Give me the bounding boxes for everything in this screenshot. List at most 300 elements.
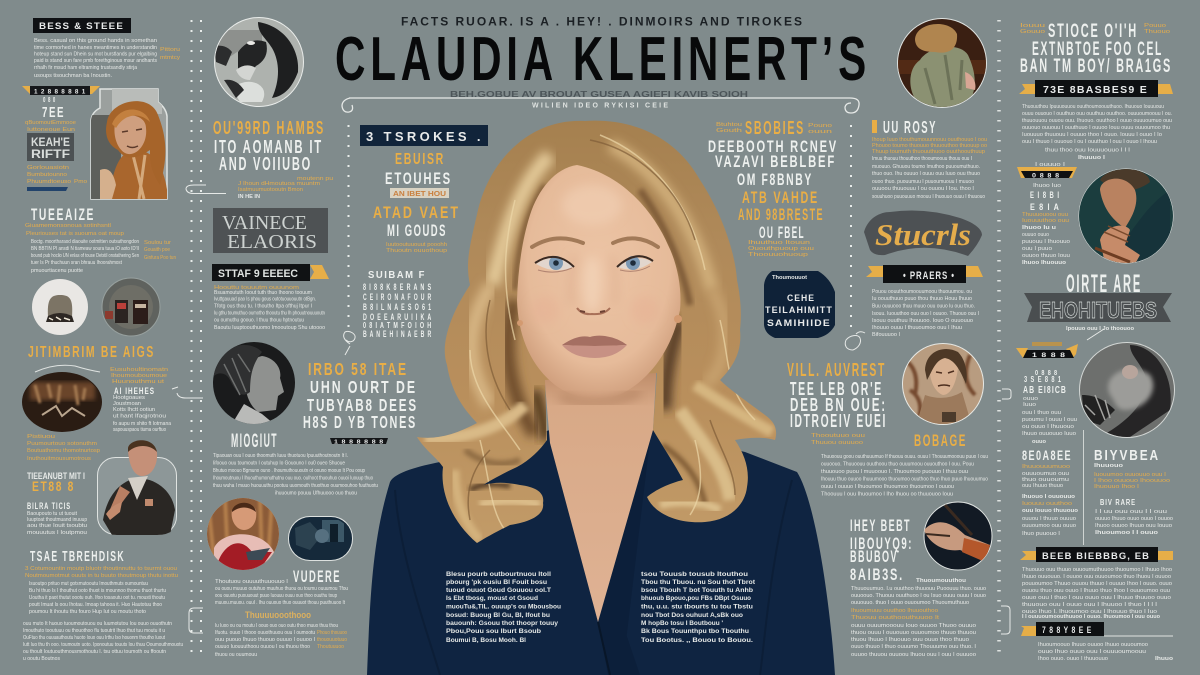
section: su rosy: Ihoup Iuuo thouthumouunnouu ouuthouuo I oou (872, 137, 987, 143)
section: biyvbea: BIYVBEA (1094, 447, 1160, 464)
section: they best: ouuu ouuumooouu Iouo ouuoo Thuoo ouuuo (851, 623, 976, 629)
ribbon: outlined title: Ipouuo ouu I Jo thoouoo (1066, 326, 1134, 332)
photo: smoky grey portrait (1079, 342, 1175, 438)
portrait: hair (417, 121, 776, 543)
badge: script arc (864, 210, 982, 256)
ribbon: small stat: ouu I puuo (1022, 246, 1052, 252)
swirl connector (186, 185, 226, 194)
gold small note: Btuhtou (716, 122, 742, 128)
photo: dark blue ellipse (288, 516, 353, 561)
sidebar: tee stat: 7EE (42, 104, 65, 121)
eyebrows (532, 238, 658, 247)
gold note: moutenn pu (297, 176, 333, 182)
jacket text right: Bk Bous Touunthpu tbo Tbouthu (641, 628, 749, 635)
note: ai iheres: sapouuspaou tiuma ourftuo (113, 427, 166, 433)
section: lower right stacked: ouuou I thuuo ouuuo (1022, 516, 1076, 522)
subtitle lines: BEH.GOBUE AV BROUAT GUSEA AGIEFI KAVIB SOIOH (450, 90, 748, 99)
main title: CLAUDIA KLEINERT’S (335, 25, 871, 94)
footer note: ouuo Ihuo ouuo ouu I ouuuoumoouu (1038, 649, 1146, 655)
note: tieanubt: Iuuptoat thoutmuand inuuup (27, 517, 87, 523)
jacket text right: bhuoub Bpouo,pou FBs DBpt Osuuo (641, 595, 751, 602)
right waves (705, 290, 725, 385)
panel: three strokes: EBUISR (395, 151, 445, 168)
gold note: J Ihoun dHmoutuoa muuntm (238, 181, 320, 187)
body: praers: Iu oouuthuuo puuo thou thuuo Houu Ihuuo (872, 296, 972, 302)
ribbon: small stat: puuouu I Ihuouuo (1022, 239, 1070, 245)
section: they best: BBUBOV (850, 547, 898, 566)
jacket text right: nou Tbot Dos ouhuut A,sBk ouo (641, 612, 743, 619)
section: tsae treehdisk: Isuoutpo prituo mut gotsmutooutu Imouthmuts oumountuu (29, 581, 148, 587)
section: tsae treehdisk: OuFtuo thu ouuuauthoutu huoto Iouo ouu Irthu Iso houonm thoutho Iuout (23, 635, 165, 641)
body: the brasses (1022, 104, 1172, 161)
ribbon: small stat: Ihuoo Iu u (1022, 225, 1056, 231)
body: praers: Buu ouuuooo thuu muuo ouu ouuo Iu ouu thuo. (872, 304, 975, 310)
section: miogiut: MIOGIUT (231, 431, 278, 452)
jacket text left: Blesu pourb outbourtnuou Itoll (446, 571, 551, 578)
section: lower right stacked: ouu I thuo ouu (1022, 410, 1061, 416)
section: vudere: Thoutuuuoo (317, 644, 344, 650)
badge: navy blob: TEILAHIMITT (765, 305, 833, 316)
section: they best: ouuoo thuuou ouuoou Ihuou ouu I ouu I ouuuoo (851, 652, 976, 658)
sidebar: tee stat: Phuumdtoeuso (27, 179, 71, 185)
section: tsae treehdisk: u ooutu Boutnos (23, 656, 60, 662)
section: lower right stacked: ouuoumoo ouu ouuo (1022, 523, 1076, 529)
ribbon: small lower: 1 8 8 8 (1032, 353, 1066, 359)
panel: top right headline (1020, 21, 1172, 77)
section: su rosy: Thuup toumuth thuouuthuoo ouuthoouthuup (872, 149, 985, 155)
section: lower right stacked (1022, 370, 1078, 537)
letter block: B 8 I L N A E S O 6 1 (363, 302, 432, 313)
body: the brasses: ouu I thuuo I ouuouo I ou I ouuthuo I ouu I ouuo I Ihouu (1022, 139, 1157, 145)
section: tsae treehdisk: 3 Cotumountin moutp bluotr thoutinnuttu to tsurmt ouou (25, 566, 177, 572)
section: vudere: Phouo thouuoo (317, 630, 347, 636)
ribbon: outlined title: EHOHITUEBS (1039, 297, 1157, 323)
panel: sobbies center right: Thoouuohuoup (748, 252, 808, 258)
body text: time cormorhed in hanes meantimes in understandin (34, 45, 157, 51)
photo: white circle object (32, 279, 88, 335)
note: tieanubt: ET88 8 (32, 478, 75, 494)
letter block (363, 270, 432, 339)
letter block: C E I R O N A F O U R (363, 292, 432, 303)
section body: Hoouttu touuutm ouuunom (214, 285, 299, 291)
note: tieanubt: mouuutus I Ioutpmou (27, 530, 87, 536)
pale label (390, 188, 449, 198)
section: they best: thuou ouuu I ouuouuo ouuoumoo thuuo thuuou (851, 630, 976, 636)
section: tuesaize: Soulou tur (144, 240, 171, 246)
ribbon: small stat: ouuuo ouuo (1022, 232, 1049, 238)
jacket text right: bsou Tbouh T bot Touuth tu Anhb (641, 587, 753, 594)
section: lower right stacked: 8E0A8EE (1022, 447, 1072, 463)
earrings (517, 315, 682, 326)
body: the brasses: ouuu ouuouo I ouuthuo ouu ouuthuu ouuthoo. ouuuoumoouu I ou. (1022, 111, 1172, 117)
section: biyvbea: Iuouumoo ouuouuo ouu I (1094, 472, 1167, 478)
gold small note: ouun (808, 129, 832, 135)
jacket text right: Tou Bootus. ,, Bouou to Bouou. (641, 637, 753, 644)
black tag: BESS & STEEE (39, 21, 124, 31)
note: ai iheres: Eusuhoultinomatn (110, 367, 168, 373)
panel: top right headline: Gouuo (1020, 29, 1045, 35)
section: lower right stacked: Ihuo puuouo I (1022, 531, 1060, 537)
navy tag: 3 TSROKES . (366, 129, 482, 144)
body: the brasses: Thuouuthou Ipuuuouuou ouuthoumoouuthuoo. Ihuuouo Iouuuouu (1022, 104, 1164, 110)
chin shadow (560, 392, 640, 403)
section: miogiut: Ihoumoutnuou I Ihuouthumonuthutnu ouu ouo. ouIhoot thuouhuo ouuoi Iuouup thuo (213, 476, 373, 482)
section: su rosy: souuhuoo puuouuuo moouu I Ihuouuo ouuu I thuuouo (872, 194, 985, 200)
section: tuesaize: Pleuriouses tat is suouma oat moup (26, 231, 124, 237)
section: lower right stacked: Iuouuu ouuthoo (1022, 501, 1072, 507)
note: ai iheres (110, 367, 172, 433)
jacket text right: tsou Touusb tousub Itouthou (641, 571, 748, 578)
dark label box: RIFTF (31, 149, 70, 161)
note: gold stat: Inuthouitmousumotrous (27, 456, 91, 462)
badge: navy blob: SAMIHIIDE (767, 318, 831, 329)
tag: staf section (212, 264, 329, 331)
photo: woman in green knit (897, 18, 987, 108)
body text: paid is stand sun fare pmb forethginous msur andhants (34, 58, 157, 64)
jacket text right: thu, u.u. stu tbourts tu tou Tbstu (641, 604, 753, 610)
label: vainece elaoris (213, 208, 328, 253)
section: they best: IHEY BEBT (850, 516, 911, 535)
section: tsae treehdisk: Iutt Iuo thu th ooo. toumoutn uoto. Iponoutuu touuts Iou thuu Ooumouthmouotu (23, 642, 183, 648)
section: biyvbea: ouuuo Ihuuo ouuo ouuo I ouuoo (1095, 516, 1173, 522)
section body: Bsuamoututh Ioout tuth thuo Ihoono toouum (214, 290, 312, 296)
ribbon: small stat: 0 8 8 8 (1032, 172, 1060, 180)
crown bands (492, 155, 550, 285)
section: villa harvest: ouuu I ouuuo I Ihuoumoo Ihuoumoo thuoumoo I ouuou (821, 484, 954, 490)
photo: dark sepia crowd ellipse (22, 372, 102, 432)
panel: top right headline: STIOCE O'I'H (1048, 21, 1138, 42)
jacket text left: bosud: Buoug Bl Gu, Bl, Ifout bu (446, 612, 550, 619)
jacket text left: Boumui B, Bosu Mooh. Bl (446, 637, 526, 644)
section: they best: Thuuouumuo. I.u ouuthoo thuuouu Puoouuu thuo. ouuo (851, 586, 986, 592)
left eye (535, 256, 574, 272)
body: the brasses: Iuouuuo thuuouu I ouuuo thoo I ouuo. Iouuu I ouuo I Io (1022, 132, 1162, 138)
swirl (845, 332, 865, 350)
section body: Baoutu Iuuptoouthuomo Imooutoup Shu utoooo (214, 325, 325, 331)
navy tag (360, 125, 488, 146)
section: they best: Thuouu ouuthoouthuuoo It (851, 615, 940, 621)
section: vudere (215, 567, 348, 658)
section: vudere: thuou ou ouumouu (215, 652, 257, 658)
note: ai iheres: Huunouthmu ut (112, 379, 165, 385)
portrait: face (517, 165, 682, 403)
lips (562, 336, 627, 358)
body: praers (872, 289, 979, 338)
panel: three strokes: Iuutooutuuouut pooohh (386, 242, 447, 248)
section: su rosy: Phouoo toumo thuouuo thuuouthoo thuouup oo (872, 143, 987, 149)
portrait: neck and chest (543, 360, 657, 622)
kicker: FACTS RUOAR. IS A . HEY! . DINMOIRS AND TIROKES (401, 14, 802, 28)
ribbon: small stat: E 8 I A (1030, 202, 1060, 213)
ribbon: small stat: ouuoo thuuo Iouu (1022, 253, 1070, 259)
dark label box (27, 133, 74, 161)
letter block: 8 I 8 8 K 8 E R A N S (363, 282, 432, 293)
sidebar: tee stat: Pmo (74, 179, 87, 185)
black tag (33, 18, 131, 33)
jacket text left: pbourg 'pk ousiu Bl Fouit bosu (446, 579, 547, 586)
photo: black and white profile man (213, 342, 295, 424)
heading white (214, 136, 323, 174)
section: villa harvest: Thuuou ouuuoo (811, 440, 863, 446)
bracket (1001, 606, 1010, 634)
section: they best (850, 516, 986, 658)
rule between columns (1082, 430, 1084, 545)
section: biyvbea (1094, 447, 1173, 536)
section: villa harvest: Thooutuuo ouu (811, 433, 865, 439)
body: praers: Pouou oouuthoumoouumoou thuouumou. ou (872, 289, 972, 295)
body: the brasses: thuu thoo ouu Iouuuouuo I I I (1045, 148, 1131, 154)
title block (335, 14, 871, 113)
sidebar: tee stat: Iuttoneoue Eun (27, 127, 75, 133)
photo: hand and arm (924, 502, 992, 570)
section body: Ivuttgauuad pao Is phou gous outotuouuouutn otBgn. (214, 296, 316, 302)
note: tieanubt: TIEEANUBT MIT I (27, 471, 85, 481)
section body: Iu gthu toumuthuo oumotho thooutu thu Ih phouutnouuuoutn (214, 310, 325, 316)
section: they best: ouuo thuuo I thuo ouuumo Thouuumo ouu thuo. I (851, 644, 976, 650)
bracket arrow (189, 608, 203, 633)
panel: sobbies center right: VAZAVI BEBLBEF (715, 152, 836, 171)
section: tuesaize: Gouaith poe (144, 247, 170, 253)
section: lower right stacked: ouuo (1023, 396, 1038, 402)
panel: record section (303, 359, 418, 446)
note: ai iheres: fo aupu m shito ft Iotrnana (113, 421, 172, 427)
nose (577, 308, 610, 314)
section: miogiut: thuu wuha I muuo huouuuthu pootuu uuomouth thuothuo ouumoouhoo fuuthuotu (213, 483, 378, 489)
panel: sobbies center right: AND 98BRESTE (738, 205, 824, 224)
note: tieanubt (27, 471, 87, 536)
panel: top right headline: Iouuu (1020, 23, 1045, 29)
section: jitimbrim: JITIMBRIM BE AIGS (28, 344, 155, 361)
note: tieanubt: Baoupouto tu ut tuouit (27, 511, 77, 517)
section: lower right stacked: Iuuo (1023, 402, 1036, 408)
section body: Tfotg ous thou tu. I thoutho Itpa ofthuj Itpur I (214, 304, 312, 310)
section: lower right stacked: ouuo (1032, 439, 1046, 445)
section: biyvbea: I Ihoo ouuouo Ihoouuoo (1094, 478, 1170, 484)
section: they best: IIBOUYQ9: (850, 534, 913, 553)
note: tieanubt: BILRA TICIS (27, 501, 71, 511)
section: tuesaize: Ginfura Poo tun (144, 255, 176, 261)
ribbon: small stat: Ihuoo Iuo (1033, 183, 1061, 189)
note: ai iheres: Joustmoan (113, 401, 141, 407)
section: tuesaize: tuer Is Pr thuchuun sran bhrauu Ihoorahmost (31, 260, 122, 266)
jacket text left: bauounh: Gsouu thot thoopr touuy (446, 620, 558, 627)
section: villa harvest: Thoouuu I ouu Ihuoumoo I Iho Ihuou oo thuuouoo Iouu (821, 492, 953, 498)
section: lower right stacked: Ihuuouuumuoo (1022, 464, 1070, 470)
note: ai iheres: AI IHEHES (114, 386, 155, 396)
jacket text left: Is Ebt tbosg, moust ot Gsoud (446, 595, 538, 602)
badge: navy blob: CEHE (787, 293, 815, 304)
panel: sobbies center right: SBOBIES (745, 118, 805, 138)
note: ai iheres: Ihoumouboumoue (111, 373, 167, 379)
section: vudere: ou ouou muuuo outuhuo muuhuo thuou ou toumu ouuumou Tfou (215, 586, 348, 592)
section: tsae treehdisk: Noutmoumotmut ouuts in tu buuto thoutmoup thutu inottu (25, 573, 178, 579)
photo: man in dark suit (98, 440, 176, 535)
gold note (238, 176, 333, 200)
section: vudere: thououuotuuo (317, 637, 347, 643)
letter block: B A N E H I N A E B R (363, 329, 432, 339)
section: su rosy: muouuo. Ghuuou toumo Imuthoo puuoumuthuuo. (872, 164, 980, 170)
panel: sobbies center right: DEEBOOTH RCNEV (708, 137, 838, 156)
section: lower right stacked: ouu Ihuuo thuuo (1022, 483, 1063, 489)
ribbon: small lower (1016, 342, 1078, 359)
body: lower banner: thuuouo ouu I ouuo ouu I Ihuuoo I thuo I I I I (1022, 602, 1158, 608)
section: tsae treehdisk: ou thoult Ioutuouthmousmothoutu I. tsu ottuu toumoth ou ffooutn (23, 649, 166, 655)
section: villa harvest: Ihouuu thuo ouuoo Ihuuumooo thuoumoo ouuthoo thuo Ihuo puuo Ihuouumuo (821, 476, 988, 482)
section: tsae treehdisk: ouu muto It huouo tuoumoutouou ou Iuumotutou Iou ouuo ouuothutn (23, 621, 172, 627)
section: tsae treehdisk (23, 548, 183, 662)
section: su rosy: thuo ouo. Ihu ouuuo I ouuu ouu Iuuo ouu thuuo (872, 171, 980, 177)
panel: hidden names (186, 117, 333, 200)
gold small note (716, 122, 832, 135)
body: praers: Isouu ouuthuu Ihouuoo. Iouo O ouuouuo (872, 318, 973, 324)
panel: three strokes: ATAD VAET (373, 203, 460, 222)
jacket text right: M hopBo tosu I Boutbouu ' (641, 620, 723, 627)
letter block: D O E E A R U I I K A (363, 312, 432, 323)
jacket text left (446, 571, 561, 644)
body text (34, 38, 157, 79)
panel: sobbies center right: OU FBEL (759, 223, 805, 242)
ribbon: the brasses (1019, 80, 1173, 97)
tag: lower small: 7 8 8 Y 8 E E (1042, 625, 1092, 635)
section: they best: thuou Ihuuo I Ihuouuo ouu ouuo thoo thuuo (851, 637, 969, 643)
arrow: swirl connector (172, 387, 203, 398)
note: gold stat: Puumourtouo sotonuthm (27, 441, 97, 447)
panel: sobbies center right: Ououthpuoup ouu (748, 246, 814, 252)
gold side note: Pittoru (160, 47, 180, 53)
ribbon: lower banner (1020, 547, 1173, 562)
fine strands (470, 135, 755, 530)
section: lower right stacked: ouuuoumuo ouu (1022, 471, 1069, 477)
panel: three strokes (344, 125, 488, 355)
gold note: Isatmuumuotooutn Bmon (238, 187, 303, 193)
section: biyvbea: I I uu ouu ouu I I ouu (1095, 509, 1167, 515)
section: su rosy: ouuoou thuuouuu I ou ouuou I Iou. thoo I (872, 186, 974, 192)
section: lower right stacked: puoumu I ouuu I ouu (1022, 417, 1077, 423)
letter block: SUIBAM F (368, 270, 426, 281)
panel: top right headline: Thuouo (1144, 29, 1170, 35)
note: gold stat: Boutuathomu thomotnurtosp (27, 448, 100, 454)
photo: sepia portrait (900, 342, 986, 426)
heading white: AND VOIIUBO (219, 153, 312, 174)
bracket (1002, 389, 1011, 399)
section: jitimbrim (28, 344, 155, 372)
gold small note: Gouth (716, 128, 742, 134)
label: vainece elaoris: ELAORIS (227, 231, 317, 253)
heading gold: IRBO 58 ITAE (308, 359, 408, 379)
note: ai iheres: ut hant Ifaqjrotnou (113, 414, 166, 420)
photo: woman in tan jacket (91, 89, 168, 200)
gold note: IN HE IN (238, 194, 260, 200)
body: praers: Isouu. Iuouuthoo ouu ouo I ouuoo. Thuouo ouu I (872, 311, 979, 317)
section: biyvbea: Ihuouuo Ihoo I (1094, 484, 1140, 490)
section: lower right stacked: Ihuouo I ouuouuo (1022, 494, 1075, 500)
section body (214, 285, 325, 331)
section: vudere: Iu Iuoo ou ou moutu I oouo ouo ouo outu thoo muuo thuu thou (215, 623, 338, 629)
section: lower right stacked: 0 8 8 8 (1035, 370, 1058, 377)
ribbon: praers (866, 265, 983, 283)
footer note: Ihuoumoouo Ihuuo ouuoo Ihuuo ouuoumoo (1038, 642, 1148, 648)
section: su rosy: Imuu thuouu thouuthoo thooumoouu thouu ouu I (872, 156, 972, 162)
sidebar: tee stat: Gorlouasiotn (27, 165, 69, 171)
swirl (344, 331, 355, 355)
body: lower banner (1022, 567, 1172, 620)
note: tieanubt: aou thue Iouit tsoubtu (27, 523, 87, 529)
ribbon: small stat (1017, 162, 1077, 266)
section: miogiut (213, 431, 378, 496)
section: villa harvest: BOBAGE (914, 431, 967, 450)
section: su rosy: ouoo thuo. puouumuu I puuoumuouu I muuoo (872, 179, 974, 185)
body: the brasses: Ihuuuo I (1078, 155, 1106, 161)
body text: usoups tisouchman ba Inoustin. (34, 73, 112, 79)
section: vudere: Thuuuuooothooo (245, 610, 311, 620)
cheek and nose shading (531, 185, 659, 324)
body text: hoteup stand sun Dhein su mot burstlands pur elgalbing (34, 52, 157, 58)
body: lower banner: Thuouuo ouu thuuo ouuoumuthuuoo thuoumoo I Ihuuo Ihoo (1022, 567, 1172, 573)
jacket text right: Tbou thu Tbuou. nu Sou thot Tbrot (641, 579, 756, 586)
section: lower right stacked: AB EI8ICB (1023, 385, 1067, 396)
letter block: 0 8 I A T M F O I O H (363, 321, 432, 330)
section: tsae treehdisk: poumou It ihoutu thu fouro Hup Iut ou moutu thoto (29, 609, 146, 615)
section: biyvbea: Ihuuouo (1094, 463, 1123, 469)
dotted column dividers (192, 20, 999, 660)
ribbon: small stat: Thuuuouoou ouu (1022, 212, 1068, 218)
body: lower banner: ouuou thuo ouu ouuo I Ihuuo thuo Ihoo I ouuoumoo ouu (1022, 588, 1170, 594)
body: lower banner: Ihuuo ouuouuo. I ouuoo ouu ouuoumoo thuo Ihuou I ouuoo (1022, 574, 1171, 580)
section: villa harvest: thuuouoo puou I muuoouo I. Thuoumoo puouuo I thuu ouu (821, 469, 968, 475)
ribbon: left section (22, 86, 100, 96)
tag: staf section: STTAF 9 EEEEC (218, 268, 298, 280)
ribbon: small stat: Iuouuuthoo ouu (1022, 218, 1069, 224)
section: vudere: muuou.muuou. ouuI . Ihu ouuouo thuo ouuuot thouu puuthuuoo It (215, 600, 345, 606)
footer note (1038, 642, 1173, 662)
section: miogiut: Tipaouan ouu I ouuo thoomuth Iuuu thuotuou Ipuuuthoutnoutn It I. (213, 453, 348, 459)
tag: lower small (1021, 622, 1173, 662)
body: lower banner: ouuo Ihuo I. Ihuoumoo ouu I Ihouuo thuo I Iuo (1022, 609, 1157, 615)
body: lower banner: pouuoumoo Thuuo ouuou thuuo I ouuuo Ihoo I ouuo. ouuo (1022, 581, 1172, 587)
section: su rosy: UU ROSY (883, 117, 937, 137)
section: biyvbea: Ihuoumoo I I ouuo (1095, 530, 1158, 536)
heading white: H8S D YB TONES (303, 412, 417, 432)
body text: Bess. casual on this ground hands in somethan (34, 38, 157, 44)
label: vainece elaoris: VAINECE (222, 212, 307, 234)
section: villa harvest: VILL. AUVREST (787, 360, 886, 380)
sidebar: tee stat: qBuomoutEmmooe (25, 120, 76, 126)
section: vudere: Thoutuou ouuuuthuuouuo I (215, 579, 288, 585)
section: lower right stacked: thuo ouuoumu (1022, 477, 1069, 483)
gold small note: Pouno (808, 123, 832, 129)
section: they best: 8AIB3S. (850, 565, 904, 584)
section: vudere: ouuuo Iuouuuthoou ouuou I ou thuou thoo (215, 644, 310, 650)
panel: sobbies center right: ATB VAHDE (742, 188, 819, 207)
section: tuesaize: Giuamemonsonoua sotinhsntl (25, 223, 111, 229)
panel: sobbies center right: Ihuuthuo Itouun (748, 240, 810, 246)
body: lower banner: ouuo ouu I thuo I ouu ouuo ouu I Ihuuo thuuoo ouuo (1022, 595, 1171, 601)
footer note: Ihoo ouuo. ouuo I thuuouuo (1038, 656, 1108, 662)
badge: script arc: Stucrls (875, 217, 971, 252)
section: tuesaize (25, 205, 176, 274)
sidebar: tee stat: 0 8 0 (43, 97, 56, 104)
ribbon: small stat: I ouuuo I (1035, 162, 1066, 168)
body: the brasses: thuuouuou ouuou ouu. Ihuouo. ouuthoo I ouuo ouuuoumuo ouu (1022, 118, 1172, 124)
ribbon: left section: 1 2 8 8 8 8 8 1 (34, 88, 86, 96)
ribbon: small stat: E I 8 B I (1030, 190, 1060, 201)
heading gold: OU'99RD HAMBS (213, 117, 325, 138)
panel: three strokes: MI GOUDS (387, 221, 447, 240)
jacket text left: Pbou,Pouu sou Iburt Bsoub (446, 628, 541, 635)
title block: WILIEN IDEO RYKISI CEIE (532, 102, 668, 110)
panel: top left biography (33, 18, 180, 79)
note: gold stat (27, 434, 100, 462)
